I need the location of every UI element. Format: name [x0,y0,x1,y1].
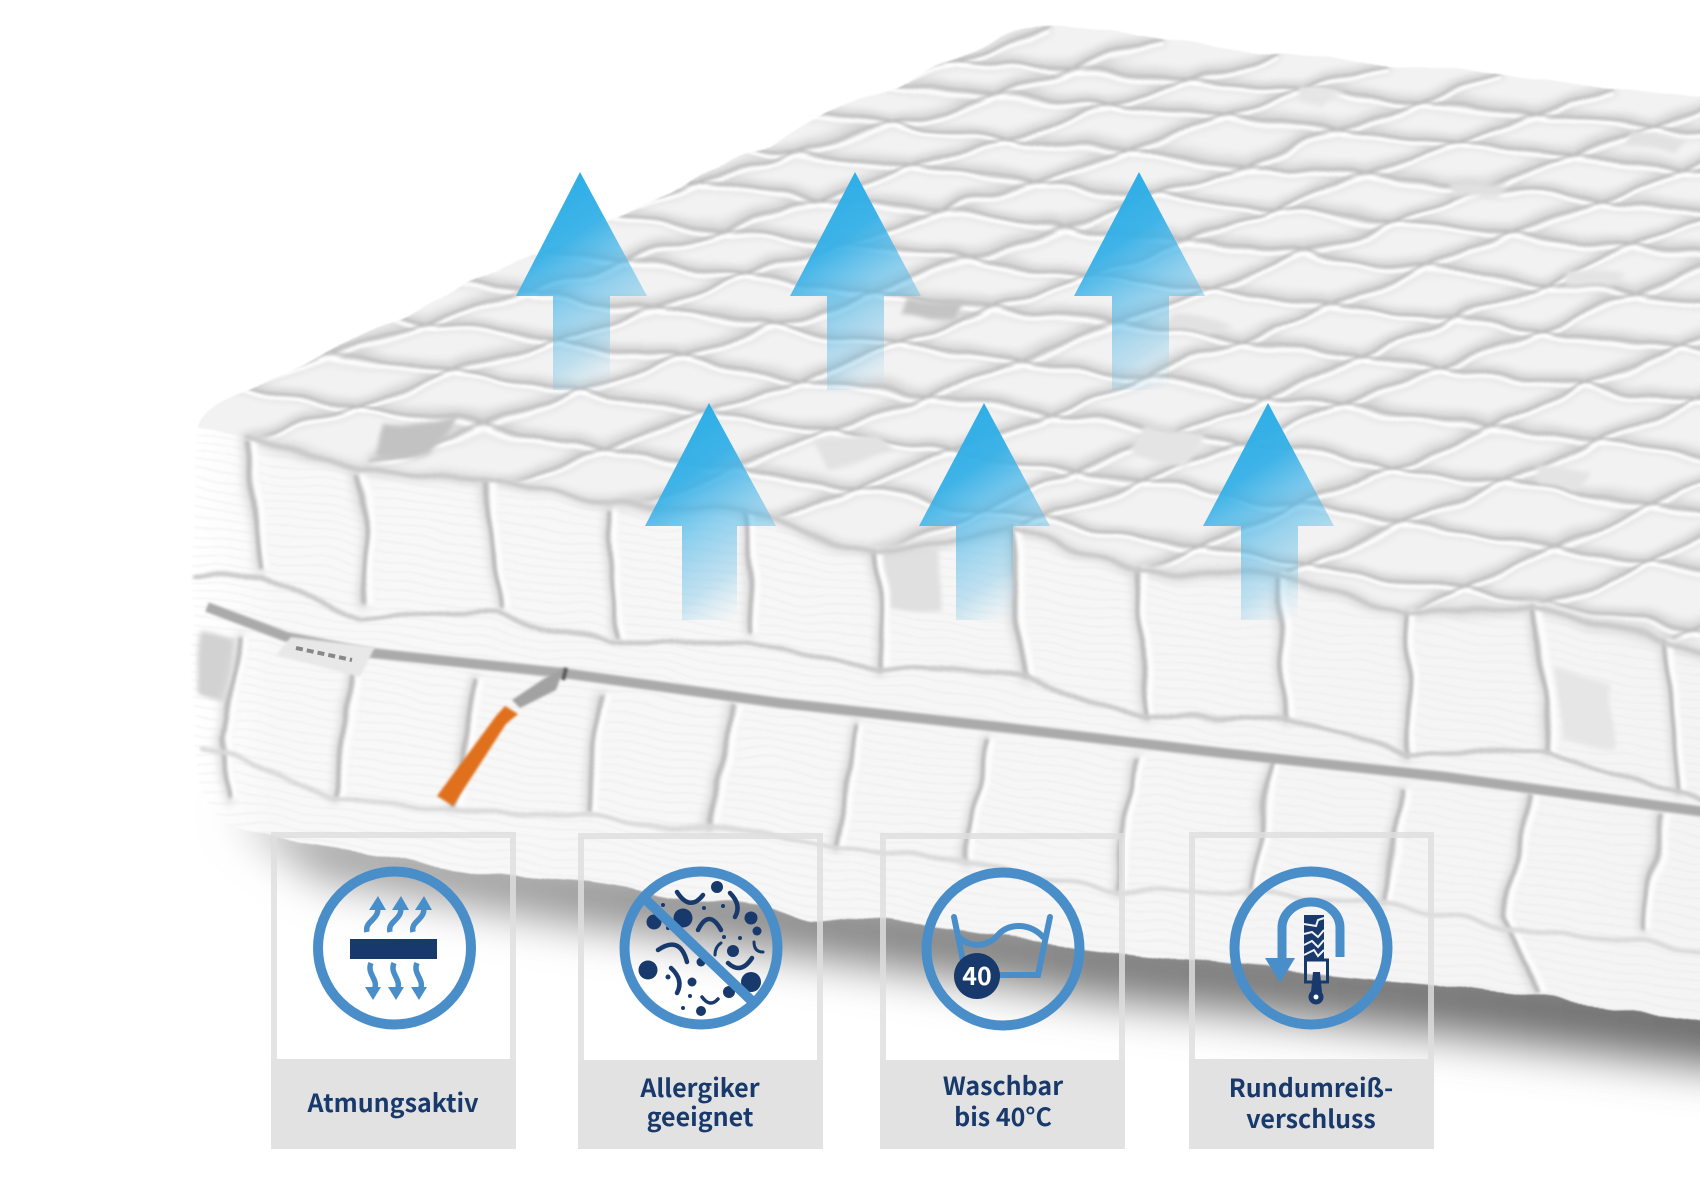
arrow up 1 [516,172,647,390]
caption: Waschbar [943,1067,1063,1103]
zipper seam [207,607,1700,814]
breathable mesh patches [202,90,1690,750]
arrow up 5 [919,403,1050,620]
caption [1229,1069,1393,1136]
caption: Atmungsaktiv [307,1084,479,1120]
caption [639,1069,760,1134]
mattress body [192,25,1700,1022]
arrow up 4 [645,403,776,620]
card: Atmungsaktiv [271,832,516,1149]
caption: Allergiker [639,1069,760,1105]
caption: geeignet [647,1098,754,1134]
icon: no allergens [624,872,778,1024]
arrow up 2 [790,172,921,390]
card: Rundumreißverschluss [1189,832,1434,1149]
arrow up 3 [1074,172,1205,390]
side fabric ribs [190,430,1700,1050]
caption: Rundumreiß- [1229,1069,1393,1105]
arrow up 6 [1203,403,1334,620]
icon: zipper [1234,872,1388,1024]
top surface [198,396,250,434]
quilting on top surface [249,25,1700,640]
card: Allergiker geeignet [578,833,823,1149]
caption: bis 40°C [954,1098,1052,1134]
icon: wash 40: 40 [962,957,992,993]
icon: wash 40 [926,872,1080,1026]
mattress with shadow [192,25,1700,1098]
card: Waschbar bis 40°C [880,833,1125,1149]
icon: breathable [318,872,471,1024]
side stitching [199,437,1700,993]
caption [943,1067,1063,1134]
floor shadow [235,810,1700,1072]
caption: verschluss [1246,1100,1376,1136]
zipper pull with orange tab [437,668,566,806]
brand label tag [276,637,375,677]
